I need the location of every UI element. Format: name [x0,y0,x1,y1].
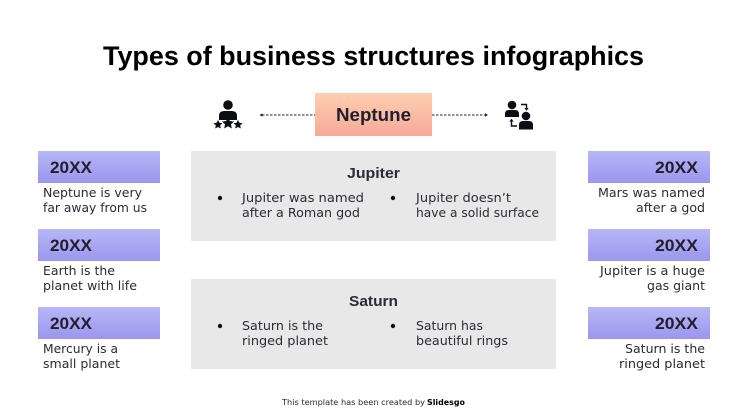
left item 2: Earth is the [43,264,115,278]
panel: Jupiter: Jupiter was named [241,191,364,205]
panel: Saturn: Saturn is the [242,319,323,333]
panel: Jupiter [191,151,556,241]
panel: Jupiter: Jupiter [347,165,400,182]
panel: Saturn: Saturn [349,293,398,310]
icon: person with three stars [214,100,242,128]
right item 3: 20XX [655,315,698,333]
right item 1 [588,151,710,215]
panel: Saturn: ringed planet [242,334,328,348]
title: Types of business structures infographics [103,41,644,71]
left item 3: Mercury is a [43,342,118,356]
right item 2: 20XX [655,237,698,255]
right item 3 [588,307,710,371]
right item 1: 20XX [655,159,698,177]
left item 3 [38,307,160,371]
left item 1: far away from us [43,201,147,215]
central box: Neptune [315,93,432,136]
left item 2: 20XX [50,237,92,255]
panel: Saturn: Saturn has [416,319,483,333]
right item 3: ringed planet [619,357,705,371]
right item 2: Jupiter is a huge [599,264,705,278]
footer credit: This template has been created by [281,398,426,407]
panel: Jupiter: have a solid surface [416,206,539,220]
panel: Jupiter: after a Roman god [242,206,360,220]
left item 3: 20XX [50,315,92,333]
right item 1: after a god [636,201,705,215]
left item 2: planet with life [43,279,137,293]
panel: Jupiter: Jupiter doesn’t [415,191,511,205]
central box: Neptune: Neptune [336,105,411,125]
left item 1: Neptune is very [43,186,142,200]
panel: Saturn: beautiful rings [416,334,508,348]
right item 2: gas giant [647,279,705,293]
icon: two people exchanging [505,101,533,130]
left item 3: small planet [43,357,120,371]
left item 1: 20XX [50,159,92,177]
right item 3: Saturn is the [625,342,705,356]
right item 2 [588,229,710,293]
arrow: right [432,113,488,117]
footer credit: Slidesgo [427,398,465,407]
left item 1 [38,151,160,215]
left item 2 [38,229,160,293]
panel: Saturn [191,279,556,369]
arrow: left [260,113,315,117]
right item 1: Mars was named [598,186,705,200]
